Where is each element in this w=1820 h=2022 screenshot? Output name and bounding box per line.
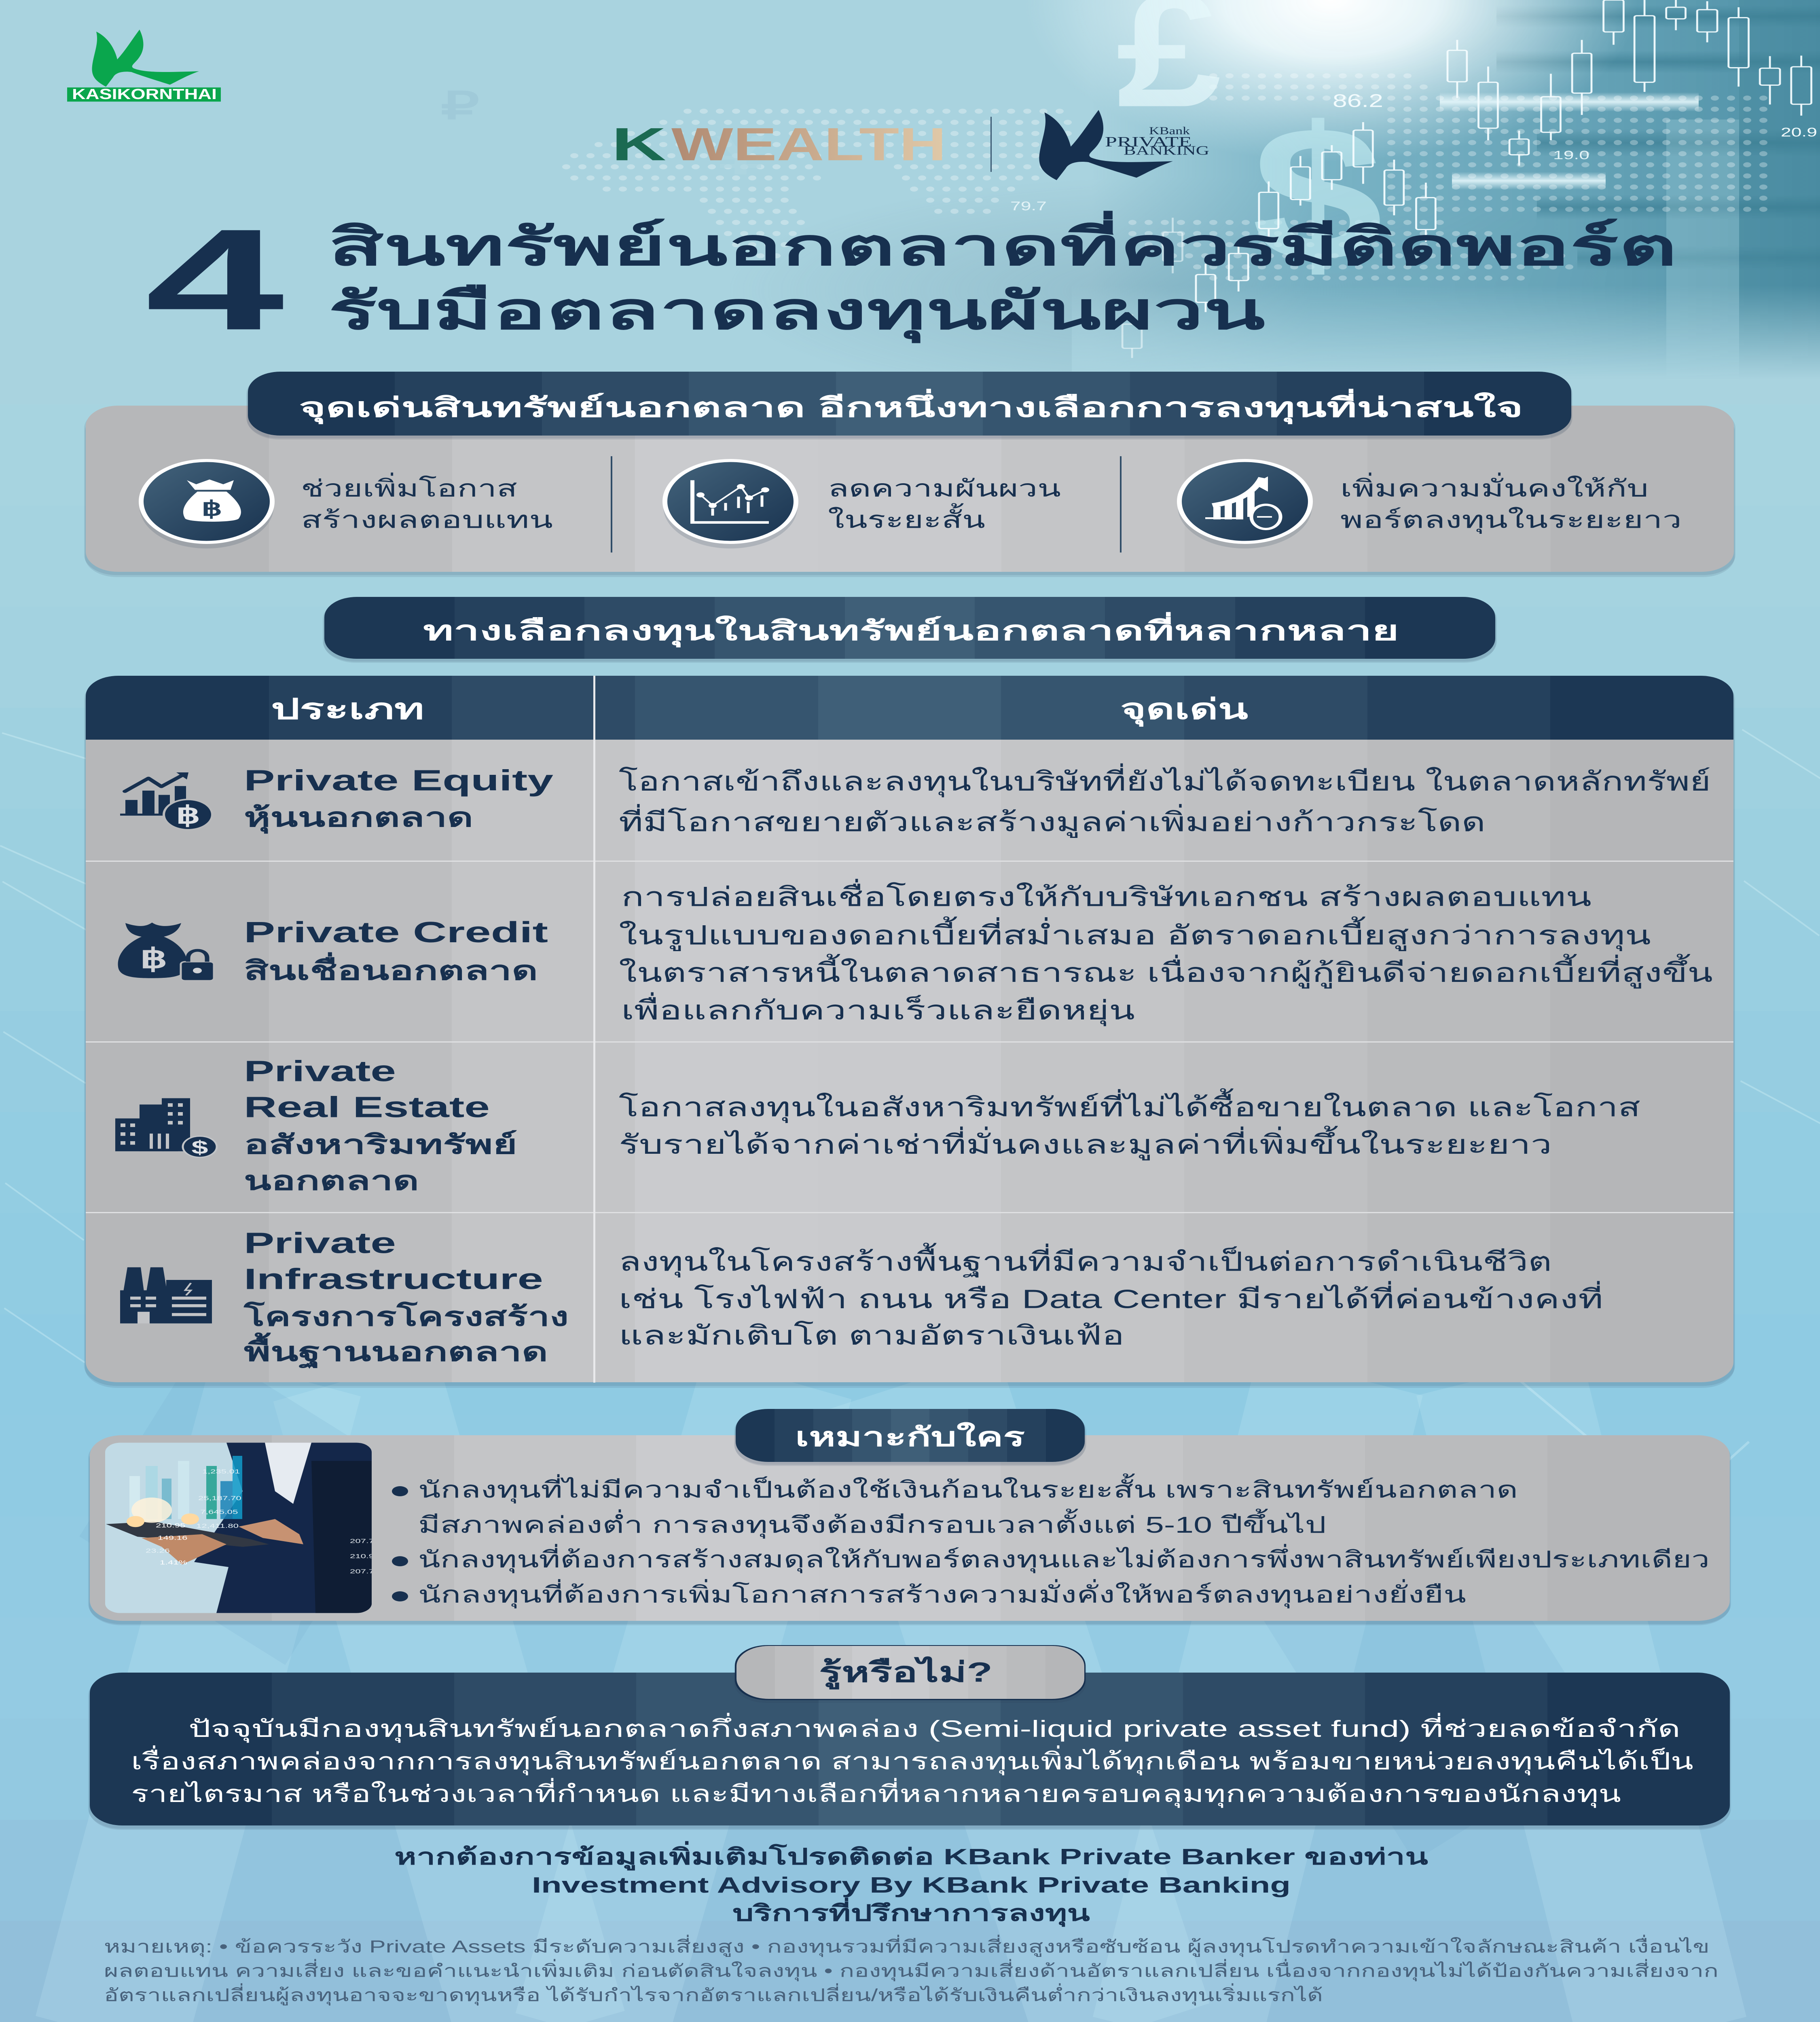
label: Private Equity: Private Equity bbox=[244, 764, 553, 797]
label: Private Real Estate: Private bbox=[244, 1055, 396, 1087]
label: Private Infrastructure: พื้นฐานนอกตลาด bbox=[244, 1332, 548, 1369]
text: more return bbox=[301, 472, 553, 533]
disclaimer: อัตราแลกเปลี่ยนผู้ลงทุนอาจจะขาดทุนหรือ ได้รับกำไรจากอัตราแลกเปลี่ยน/หรือได้รับเงินคืนต่ำกว่าเงินลงทุนเริ่มแรกได้ bbox=[104, 1984, 1323, 2005]
text: did you know body: ปัจจุบันมีกองทุนสินทรัพย์นอกตลาดกึ่งสภาพคล่อง (Semi-liquid private asset fund) ที่ช่วยลดข้อจำกัด bbox=[188, 1713, 1680, 1743]
panel: table background bbox=[86, 676, 1733, 1383]
icon: volatile chart bbox=[663, 461, 798, 548]
background art: coins, map dots, currency and candlesticks: 79.7 bbox=[1010, 199, 1047, 213]
text: long term stability: เพิ่มความมั่นคงให้กับ bbox=[1340, 472, 1649, 501]
description: Private Credit: การปล่อยสินเชื่อโดยตรงให้กับบริษัทเอกชน สร้างผลตอบแทน bbox=[621, 879, 1591, 912]
logo: KBank Private Banking bbox=[1039, 110, 1209, 180]
photo: businessman with tablet: 12,411.80 bbox=[196, 1523, 239, 1529]
heading: highlights: จุดเด่นสินทรัพย์นอกตลาด อีกหนึ่งทางเลือกการลงทุนที่น่าสนใจ bbox=[299, 389, 1523, 424]
photo: businessman with tablet: 210.95 bbox=[156, 1522, 185, 1529]
label: Private Real Estate: อสังหาริมทรัพย์ bbox=[244, 1130, 517, 1159]
logo: Kasikornthai: KASIKORNTHAI bbox=[72, 86, 217, 102]
description: Private Credit bbox=[619, 879, 1713, 1026]
panel: did you know heading box bbox=[735, 1645, 1086, 1700]
list: suitable investors bbox=[392, 1473, 1710, 1608]
description: Private Credit: ในรูปแบบของดอกเบี้ยที่สม่ำเสมอ อัตราดอกเบี้ยสูงกว่าการลงทุน bbox=[619, 916, 1651, 951]
icon: factory bbox=[120, 1267, 212, 1323]
photo: businessman with tablet: 207.7 bbox=[350, 1568, 374, 1575]
photo: businessman with tablet bbox=[105, 1443, 374, 1613]
icon: bar chart with baht coin bbox=[120, 772, 212, 830]
logo: KBank Private Banking: PRIVATE bbox=[1105, 134, 1192, 150]
table header: ประเภท bbox=[271, 693, 424, 725]
description: Private Infrastructure: เช่น โรงไฟฟ้า ถนน หรือ Data Center มีรายได้ที่ค่อนข้างคงที่ bbox=[619, 1281, 1603, 1314]
text: long term stability: พอร์ตลงทุนในระยะยาว bbox=[1340, 507, 1682, 534]
logo: K WEALTH: WEALTH bbox=[671, 118, 946, 170]
photo: businessman with tablet: 7,645.05 bbox=[200, 1509, 238, 1515]
background art: coins, map dots, currency and candlesticks: ₽ bbox=[441, 85, 479, 127]
list: suitable investors: มีสภาพคล่องต่ำ การลงทุนจึงต้องมีกรอบเวลาตั้งแต่ 5-10 ปีขึ้นไป bbox=[418, 1508, 1326, 1539]
text: lower volatility: ลดความผันผวน bbox=[828, 476, 1061, 501]
description: Private Infrastructure bbox=[619, 1243, 1603, 1350]
panel: highlights heading bar bbox=[248, 372, 1571, 436]
row: Private Equity bbox=[120, 764, 1711, 838]
contact text: Investment Advisory By KBank Private Banking bbox=[532, 1873, 1291, 1897]
panel: who is it for bbox=[90, 1435, 1729, 1621]
label: Private Equity bbox=[244, 764, 553, 834]
label: Private Equity: หุ้นนอกตลาด bbox=[244, 803, 473, 834]
label: Private Real Estate: Real Estate bbox=[244, 1091, 490, 1123]
icon: bar chart with baht coin: ฿ bbox=[176, 802, 201, 829]
disclaimer bbox=[104, 1935, 1718, 2005]
list: suitable investors: นักลงทุนที่ไม่มีความจำเป็นต้องใช้เงินก้อนในระยะสั้น เพราะสินทรัพย์นอกตลาด bbox=[418, 1473, 1518, 1504]
label: Private Infrastructure: โครงการโครงสร้าง bbox=[243, 1301, 569, 1331]
logo: K WEALTH: K bbox=[612, 118, 666, 170]
description: Private Equity: ที่มีโอกาสขยายตัวและสร้างมูลค่าเพิ่มอย่างก้าวกระโดด bbox=[619, 804, 1486, 838]
logo: KBank Private Banking: BANKING bbox=[1124, 144, 1209, 158]
contact text: บริการที่ปรึกษาการลงทุน bbox=[732, 1897, 1090, 1927]
description: Private Real Estate bbox=[619, 1088, 1640, 1161]
label: Private Infrastructure bbox=[243, 1227, 569, 1369]
label: Private Credit: Private Credit bbox=[244, 916, 548, 949]
photo: businessman with tablet: 207.7 bbox=[350, 1538, 374, 1544]
table header bbox=[271, 693, 1248, 727]
label: Private Credit: สินเชื่อนอกตลาด bbox=[244, 952, 538, 986]
icon: money bag with lock bbox=[118, 922, 214, 981]
description: Private Real Estate: รับรายได้จากค่าเช่าที่มั่นคงและมูลค่าที่เพิ่มขึ้นในระยะยาว bbox=[619, 1126, 1552, 1161]
title bbox=[145, 199, 1677, 360]
background art: coins, map dots, currency and candlesticks: ¥ bbox=[716, 124, 765, 186]
background art: coins, map dots, currency and candlesticks: 86.2 bbox=[1333, 91, 1383, 111]
label: Private Infrastructure: Private bbox=[244, 1227, 396, 1259]
logo: KBank Private Banking: KBank bbox=[1149, 125, 1190, 137]
text: lower volatility bbox=[828, 476, 1061, 533]
title: สินทรัพย์นอกตลาดที่ควรมีติดพอร์ต bbox=[328, 211, 1677, 276]
list: suitable investors: นักลงทุนที่ต้องการเพิ่มโอกาสการสร้างความมั่งคั่งให้พอร์ตลงทุนอย่างยั่งยืน bbox=[418, 1579, 1466, 1608]
description: Private Equity bbox=[619, 764, 1711, 838]
heading: did you know: รู้หรือไม่? bbox=[819, 1656, 993, 1690]
table header: จุดเด่น bbox=[1120, 693, 1248, 727]
row: Private Infrastructure bbox=[120, 1227, 1603, 1369]
description: Private Credit: เพื่อแลกกับความเร็วและยืดหยุ่น bbox=[621, 992, 1135, 1026]
description: Private Infrastructure: ลงทุนในโครงสร้างพื้นฐานที่มีความจำเป็นต่อการดำเนินชีวิต bbox=[619, 1243, 1552, 1278]
label: Private Infrastructure: Infrastructure bbox=[244, 1263, 543, 1295]
background art: coins, map dots, currency and candlesticks: $ bbox=[1252, 87, 1383, 301]
label: Private Real Estate bbox=[244, 1055, 517, 1195]
text: long term stability bbox=[1340, 472, 1682, 534]
icon: money bag with lock: ฿ bbox=[140, 943, 167, 974]
title: รับมือตลาดลงทุนผันผวน bbox=[328, 282, 1265, 343]
photo: businessman with tablet: 1.41% bbox=[160, 1559, 187, 1566]
heading: who is it for: เหมาะกับใคร bbox=[795, 1422, 1025, 1452]
panel: who is it for heading bar bbox=[736, 1409, 1085, 1462]
photo: businessman with tablet: 149.16 bbox=[158, 1535, 187, 1541]
icon: money bag bbox=[140, 461, 274, 548]
description: Private Real Estate: โอกาสลงทุนในอสังหาริมทรัพย์ที่ไม่ได้ซื้อขายในตลาด และโอกาส bbox=[619, 1088, 1640, 1123]
description: Private Infrastructure: และมักเติบโต ตามอัตราเงินเฟ้อ bbox=[619, 1321, 1124, 1350]
background art: coins, map dots, currency and candlesticks: 20.9 bbox=[1781, 125, 1817, 139]
icon: buildings with dollar coin bbox=[115, 1098, 217, 1158]
text: did you know body bbox=[131, 1713, 1693, 1808]
text: did you know body: รายไตรมาส หรือในช่วงเวลาที่กำหนด และมีทางเลือกที่หลากหลายครอบคลุมทุกความต้องการของนักลงทุน bbox=[131, 1778, 1621, 1808]
icon: growth and clock bbox=[1178, 461, 1312, 548]
text: lower volatility: ในระยะสั้น bbox=[828, 503, 985, 533]
text: more return: สร้างผลตอบแทน bbox=[301, 507, 553, 533]
panel: investment options heading bar bbox=[324, 597, 1495, 659]
logo: Kasikornthai bbox=[67, 30, 221, 102]
heading: investment options: ทางเลือกลงทุนในสินทรัพย์นอกตลาดที่หลากหลาย bbox=[423, 612, 1399, 647]
icon: money bag: ฿ bbox=[201, 497, 222, 520]
icon: buildings with dollar coin: $ bbox=[191, 1137, 208, 1158]
text: more return: ช่วยเพิ่มโอกาส bbox=[301, 472, 517, 501]
label: Private Credit bbox=[244, 916, 548, 986]
label: Private Real Estate: นอกตลาด bbox=[244, 1166, 419, 1195]
photo: businessman with tablet: 210.9 bbox=[350, 1553, 374, 1560]
panel: did you know bbox=[90, 1673, 1729, 1825]
contact text bbox=[394, 1841, 1428, 1927]
photo: businessman with tablet: 1,235.01 bbox=[202, 1468, 240, 1475]
panel: highlights bbox=[86, 406, 1734, 572]
contact text: หากต้องการข้อมูลเพิ่มเติมโปรดติดต่อ KBank Private Banker ของท่าน bbox=[394, 1841, 1428, 1871]
photo: businessman with tablet: 23.26 bbox=[146, 1548, 170, 1554]
title: 4 bbox=[145, 199, 286, 360]
row: Private Credit bbox=[118, 879, 1713, 1026]
background art: coins, map dots, currency and candlesticks: 19.0 bbox=[1553, 149, 1589, 162]
row: Private Real Estate bbox=[115, 1055, 1640, 1195]
photo: businessman with tablet: 25,187.70 bbox=[198, 1495, 241, 1502]
